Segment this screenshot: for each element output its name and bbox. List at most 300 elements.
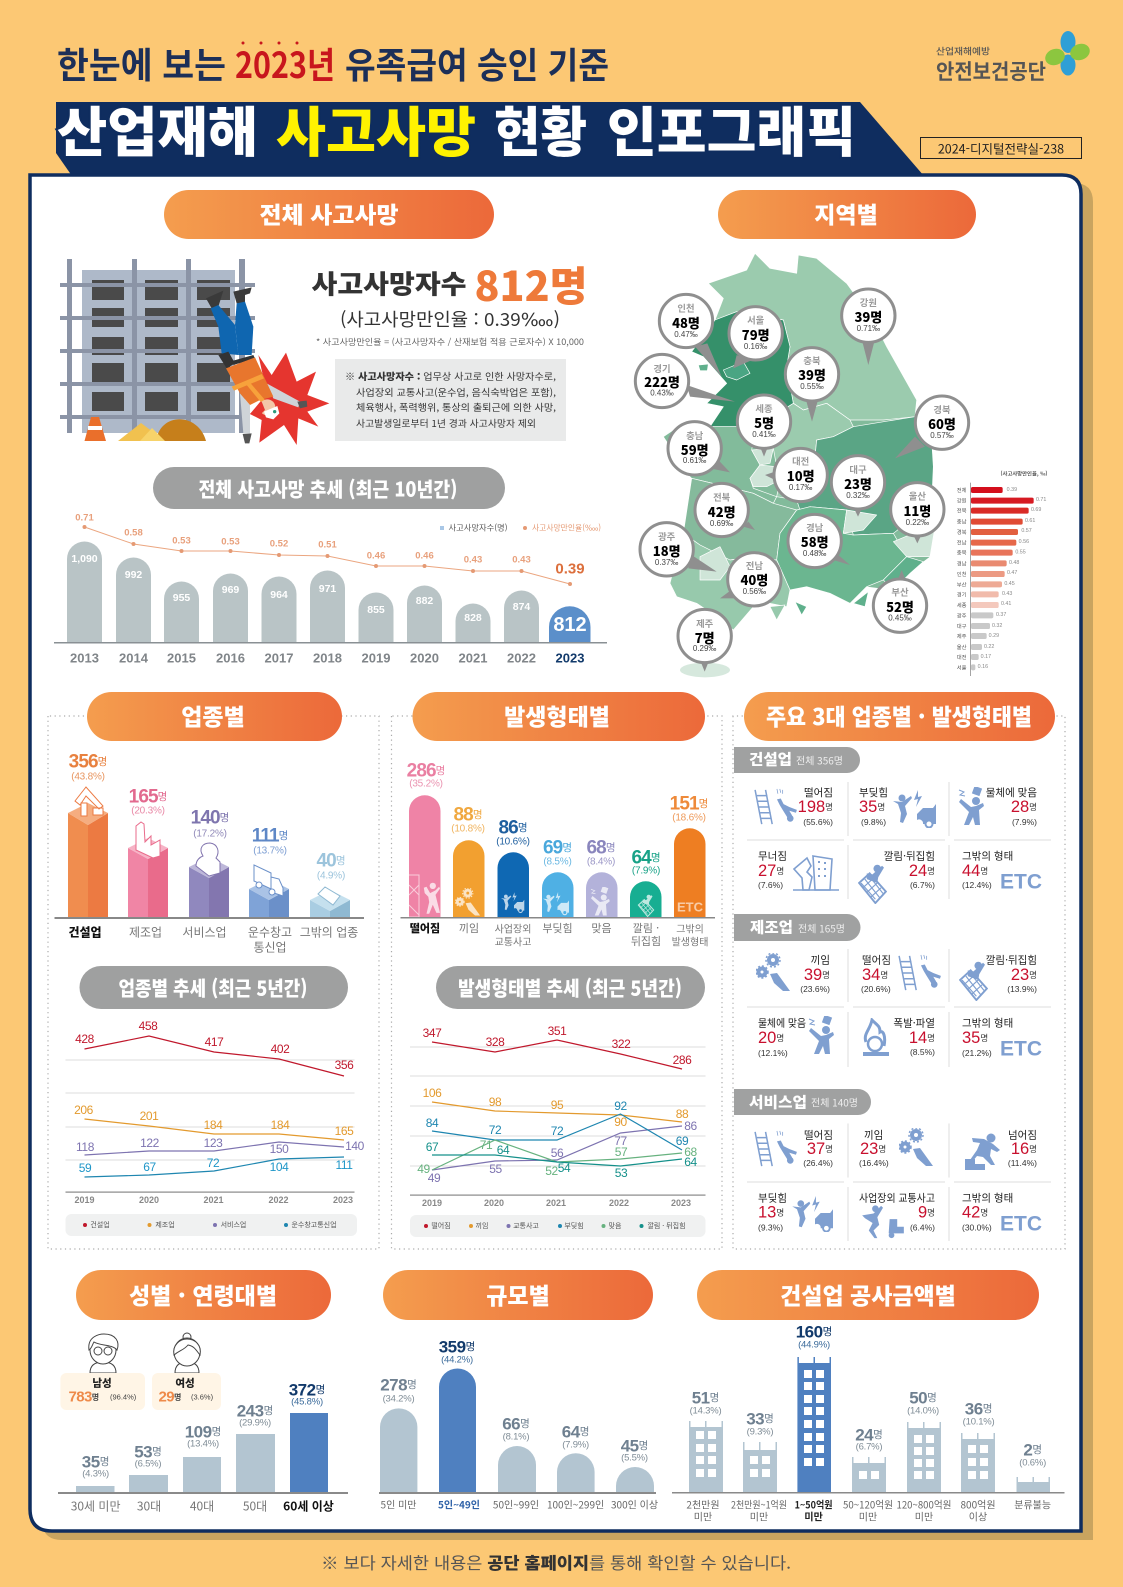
section: 건설업 header — [734, 747, 860, 773]
cell: 서비스업 부딪힘 — [758, 1190, 833, 1232]
chart: regional rate bars: 0.57 — [1021, 528, 1032, 534]
cell: 제조업 떨어짐 — [861, 952, 941, 994]
legend: accident-type trend: 끼임 — [476, 1221, 488, 1231]
map callouts: 0.56‰ — [743, 587, 766, 596]
chart: regional rate bars: 제주 — [957, 632, 967, 640]
title: 인포그래픽 — [607, 88, 856, 168]
cell: 제조업 그밖의 형태: 35명 — [962, 1029, 988, 1047]
map callouts: 0.29‰ — [693, 644, 716, 653]
line chart: accident-type trend: 64 — [497, 1143, 510, 1157]
line chart: industry trend: 2021 — [203, 1195, 224, 1205]
legend: accident-type trend — [410, 1215, 706, 1237]
accident-type labels: 교통사고 — [495, 934, 531, 948]
chart: 10 year bars: 874 — [513, 601, 530, 613]
cell: 제조업 깔림 뒤집힘: 23명 — [1011, 966, 1037, 984]
heading: 발생형태별 — [412, 692, 705, 741]
chart: 10 year bars: 2019 — [362, 650, 390, 666]
heading: 지역별: 지역별 — [814, 196, 878, 230]
accident-type labels: 뒤집힘 — [631, 933, 661, 949]
industry labels: 165명 — [129, 786, 167, 808]
chart: regional rate bars: 0.55 — [1015, 549, 1026, 555]
map callouts: 0.61‰ — [683, 456, 706, 465]
chart: regional rate bars: 0.17 — [981, 654, 991, 660]
chart: regional rate bars: 0.41 — [1001, 601, 1011, 607]
line chart: industry trend: 118 — [76, 1140, 95, 1154]
cell: 서비스업 떨어짐: (26.4%) — [803, 1158, 833, 1168]
industry labels: 그밖의 업종 — [300, 924, 358, 940]
line chart: accident-type trend: 351 — [548, 1024, 567, 1038]
line chart: industry trend: 458 — [139, 1019, 158, 1033]
cell: 건설업 부딪힘: 35명 — [859, 798, 885, 816]
map callouts: 0.45‰ — [888, 613, 912, 622]
chart: construction cost buildings: 36명 — [965, 1400, 992, 1418]
line chart: industry trend: 2023 — [333, 1195, 353, 1205]
cell: 제조업 폭발 파열: (8.5%) — [910, 1047, 935, 1057]
map callouts: 7명 — [695, 628, 715, 647]
chart: company size bars — [379, 1338, 658, 1512]
heading: 10년 추세 — [153, 467, 505, 509]
map callouts: 0.22‰ — [906, 518, 929, 527]
line chart: accident-type trend: 92 — [614, 1099, 627, 1113]
chart: regional rate bars: 0.61 — [1025, 518, 1035, 524]
accident-type labels: (10.6%) — [496, 836, 530, 848]
chart: 10 year bars: 964 — [270, 589, 288, 601]
card: male: 남성 — [92, 1376, 112, 1390]
chart: 10 year bars: 969 — [222, 584, 239, 596]
chart: regional rate bars: 0.47 — [1007, 570, 1017, 576]
map callouts: 서울 — [747, 313, 765, 327]
line chart: accident-type trend: 72 — [551, 1124, 564, 1138]
cell: 제조업 그밖의 형태 — [962, 1016, 1042, 1060]
map callouts: 인천 — [677, 300, 695, 314]
cell: 서비스업 떨어짐 — [755, 1128, 833, 1168]
section: 서비스업 header — [734, 1089, 871, 1115]
accident-type labels: (35.2%) — [409, 778, 443, 790]
legend: industry trend — [66, 1214, 357, 1236]
cell: 서비스업 그밖의 형태: 42명 — [962, 1204, 988, 1222]
chart: company size bars: (44.2%) — [441, 1354, 473, 1366]
accident-type labels: 발생형태 — [672, 934, 708, 948]
line chart: accident-type trend: 2021 — [546, 1198, 566, 1208]
heading: 성별·연령대별: 성별 · 연령대별 — [129, 1277, 277, 1311]
chart: company size bars: 45명 — [621, 1436, 648, 1456]
chart: 10 year bars: 2023 — [556, 650, 584, 666]
cell: 제조업 끼임: 끼임 — [811, 952, 830, 968]
line chart: accident-type trend: 49 — [417, 1162, 430, 1176]
cell: 서비스업 그밖의 형태 — [962, 1190, 1042, 1236]
line chart: industry trend: 184 — [271, 1118, 290, 1132]
heading: 주요 3대 — [744, 692, 1055, 741]
industry labels — [68, 752, 358, 956]
chart: age bars: 109명 — [185, 1422, 221, 1442]
heading: 10년 추세: 전체 사고사망 추세 (최근 10년간) — [198, 474, 458, 502]
map: Korea regions — [663, 253, 935, 677]
map callouts: 0.55‰ — [800, 382, 824, 391]
legend: accident-type trend: 맞음 — [609, 1221, 622, 1231]
map callouts: 23명 — [844, 474, 872, 493]
cell: 제조업 그밖의 형태: ETC — [1000, 1038, 1042, 1060]
chart: regional rate bars: 경북 — [957, 528, 967, 536]
map callouts: 40명 — [740, 570, 768, 589]
map callouts: 48명 — [672, 313, 700, 332]
note box: definition: ※ 사고사망자수 : 업무상 사고로 인한 사망자수로, — [345, 369, 556, 383]
cell: 서비스업 그밖의 형태: 그밖의 형태 — [962, 1190, 1013, 1206]
chart: regional rate bars: 0.56 — [1019, 539, 1029, 545]
line chart: accident-type trend: 347 — [423, 1026, 442, 1040]
line chart: accident-type trend: 54 — [558, 1161, 571, 1175]
cell: 건설업 떨어짐 — [755, 785, 833, 827]
accident-type labels: 부딪힘 — [542, 920, 573, 936]
chart: regional rate bars: 경기 — [957, 590, 967, 598]
cell: 건설업 무너짐: (7.6%) — [758, 880, 783, 890]
chart: 10 year bars: 2016 — [216, 650, 245, 666]
chart: regional rate bars: 강원 — [957, 497, 967, 505]
chart: regional rate bars: 전남 — [957, 539, 967, 547]
line chart: accident-type trend: 86 — [684, 1119, 697, 1133]
map callouts: 222명 — [644, 372, 680, 391]
accident-type labels: (18.6%) — [672, 812, 706, 824]
accident-type labels: (10.8%) — [451, 824, 485, 834]
chart: industry isometric bars — [54, 787, 364, 919]
section: 제조업 header: 전체 165명 — [798, 920, 845, 936]
line chart: accident-type trend: 286 — [673, 1053, 692, 1067]
cell: 서비스업 부딪힘: 부딪힘 — [758, 1190, 787, 1206]
cell: 제조업 떨어짐: 34명 — [862, 966, 888, 984]
chart: age bars: 372명 — [289, 1380, 325, 1400]
legend: accident-type trend: 부딪힘 — [564, 1221, 584, 1231]
title: 현황 — [494, 88, 587, 168]
cell: 건설업 그밖의 형태 — [962, 848, 1042, 894]
chart: 10 year bars — [54, 542, 607, 666]
line chart: accident-type trend: 90 — [614, 1115, 627, 1129]
cell: 제조업 그밖의 형태: 그밖의 형태 — [962, 1016, 1013, 1030]
legend: 10 year chart: 사고사망자수(명) — [448, 522, 508, 534]
cell: 서비스업 끼임: (16.4%) — [859, 1158, 889, 1168]
cell: 서비스업 끼임 — [859, 1128, 933, 1168]
line chart: accident-type trend: 88 — [676, 1107, 689, 1121]
line chart: industry trend: 2020 — [139, 1195, 159, 1205]
chart: construction cost buildings: 2천만원~1억원 — [731, 1496, 787, 1512]
line chart: industry trend: 123 — [204, 1136, 223, 1150]
accident-type labels: (8.5%) — [543, 856, 572, 868]
chart: construction cost buildings: 분류불능 — [1014, 1496, 1051, 1512]
map callouts: 58명 — [801, 532, 829, 551]
chart: 10 year bars: 2013 — [70, 650, 99, 666]
cell: 제조업 폭발 파열: 폭발·파열 — [893, 1016, 935, 1030]
chart: rate line: 0.46 — [415, 550, 434, 562]
chart: age bars: 35명 — [82, 1452, 109, 1472]
cell: 건설업 깔림 뒤집힘: 깔림·뒤집힘 — [884, 848, 935, 864]
accident-type labels: 떨어짐 — [410, 920, 440, 936]
chart: age bars: 30대 — [137, 1498, 161, 1514]
accident-type labels: 69명 — [543, 838, 572, 858]
chart: regional rate bars: 충남 — [957, 518, 967, 526]
chart: company size bars: (5.5%) — [621, 1452, 648, 1464]
heading: 건설업 공사금액별 — [697, 1270, 1039, 1320]
heading: 규모별 — [383, 1270, 653, 1320]
line chart: industry trend: 150 — [270, 1142, 289, 1156]
chart: company size bars: 64명 — [562, 1422, 589, 1442]
accident-type labels: 151명 — [670, 794, 708, 814]
section: 서비스업 header: 전체 140명 — [811, 1094, 858, 1110]
chart: rate line: 0.43 — [464, 554, 482, 566]
chart: construction cost buildings: (14.0%) — [907, 1406, 939, 1416]
cell: 건설업 깔림 뒤집힘: (6.7%) — [910, 880, 935, 890]
map callouts: 18명 — [653, 541, 681, 560]
accident-type labels: 88명 — [453, 804, 483, 826]
chart: 10 year bars: 992 — [125, 569, 142, 581]
chart: 10 year bars: 2018 — [313, 650, 342, 666]
title: 산업재해 — [57, 88, 258, 168]
chart: rate line: 0.39 — [555, 560, 585, 578]
code box: 2024-디지털전략실-238 — [938, 138, 1064, 158]
cell: 서비스업 떨어짐: 37명 — [807, 1140, 833, 1158]
section: 제조업 header: 제조업 — [750, 916, 793, 938]
chart: company size bars: 5인~49인 — [438, 1496, 480, 1512]
chart: 10 year bars: 2021 — [459, 650, 487, 666]
card: male: (96.4%) — [110, 1392, 137, 1402]
line chart: industry trend: 2022 — [268, 1195, 289, 1205]
chart: construction cost buildings — [672, 1322, 1064, 1524]
chart: regional rate bars: 0.16 — [978, 664, 988, 670]
cell: 제조업 깔림 뒤집힘: 깔림·뒤집힘 — [986, 952, 1037, 968]
cell: 제조업 물체에 맞음: (12.1%) — [758, 1048, 788, 1058]
chart: regional rate bars: 전체 — [957, 486, 967, 494]
chart: company size bars: 300인 이상 — [611, 1496, 658, 1512]
chart: accident-type bars — [400, 795, 715, 918]
map callouts: 0.69‰ — [710, 519, 733, 528]
chart: rate line — [75, 512, 585, 586]
line chart: accident-type trend — [410, 1024, 706, 1208]
chart: construction cost buildings: 51명 — [692, 1388, 719, 1408]
cell: 서비스업 부딪힘: 13명 — [758, 1204, 784, 1222]
chart: regional rate bars: 경남 — [957, 559, 967, 567]
chart: construction cost buildings: 120~800억원 — [896, 1496, 952, 1512]
heading: 전체 사고사망: 전체 사고사망 — [260, 196, 398, 230]
chart: age bars: (13.4%) — [187, 1438, 219, 1450]
map callouts: 경북 — [933, 402, 951, 416]
heading: 전체 사고사망 — [164, 190, 494, 239]
chart: 10 year bars: 2020 — [410, 650, 439, 666]
accident-type labels: 끼임 — [459, 920, 479, 936]
chart: company size bars: 5인 미만 — [381, 1496, 416, 1512]
chart: construction cost buildings: 50~120억원 — [843, 1496, 893, 1512]
chart: company size bars: 50인~99인 — [493, 1496, 539, 1512]
cell: 서비스업 끼임: 끼임 — [864, 1128, 883, 1142]
cell: 건설업 무너짐: 27명 — [758, 862, 784, 880]
stat: 사고사망자수 812명 — [312, 253, 588, 313]
map callouts: 제주 — [696, 616, 714, 630]
chart: rate line: 0.46 — [367, 550, 385, 562]
industry labels: 서비스업 — [182, 924, 227, 940]
map callouts: 부산 — [891, 584, 909, 598]
chart: company size bars: 359명 — [439, 1338, 475, 1356]
cell: 서비스업 끼임: 23명 — [860, 1140, 886, 1158]
line chart: accident-type trend: 57 — [615, 1145, 628, 1159]
chart: construction cost buildings: 미만 — [694, 1508, 712, 1524]
map callouts: 0.41‰ — [752, 430, 776, 439]
line chart: accident-type trend: 72 — [489, 1123, 502, 1137]
line chart: industry trend: 72 — [207, 1156, 220, 1170]
chart: age bars: (4.3%) — [82, 1468, 109, 1480]
line chart: industry trend: 2019 — [74, 1195, 95, 1205]
heading: 성별·연령대별 — [76, 1270, 331, 1320]
map callouts: 0.47‰ — [674, 330, 698, 339]
map callouts: 0.57‰ — [930, 431, 954, 440]
chart: age bars: 243명 — [237, 1402, 273, 1420]
map callouts: 강원 — [860, 295, 877, 309]
footer note: ※ 보다 자세한 내용은 공단 홈페이지 를 통해 확인할 수 있습니다. — [321, 1550, 791, 1574]
chart: regional rate bars: 0.69 — [1031, 507, 1041, 513]
heading: 발생형태별: 발생형태별 — [504, 698, 610, 732]
line chart: industry trend: 165 — [335, 1124, 354, 1138]
map callouts: 0.32‰ — [846, 491, 870, 500]
industry labels: 40명 — [316, 850, 346, 872]
heading: 주요 3대: 주요 3대 업종별 · 발생형태별 — [766, 698, 1032, 732]
map callouts: 39명 — [798, 365, 826, 384]
line chart: accident-type trend: 52 — [545, 1164, 558, 1178]
chart: 10 year bars: 855 — [367, 604, 385, 616]
chart: regional rate bars: 인천 — [957, 570, 967, 578]
cell: 서비스업 사업장외 교통사고: 사업장외 교통사고 — [859, 1190, 935, 1206]
legend: industry trend: 운수창고통신업 — [291, 1220, 337, 1230]
line chart: accident-type trend: 55 — [489, 1162, 502, 1176]
accident-type labels — [407, 760, 708, 949]
note box: definition: 사업장외 교통사고(운수업, 음식숙박업은 포함), — [356, 385, 556, 399]
chart: regional rate bars: 0.71 — [1036, 497, 1046, 503]
cell: 건설업 물체에 맞음: (7.9%) — [1012, 817, 1037, 827]
map callouts: 79명 — [742, 325, 770, 344]
line chart: industry trend: 59 — [79, 1161, 92, 1175]
chart: age bars: 30세 미만 — [71, 1498, 121, 1514]
industry labels: 통신업 — [253, 938, 287, 956]
section: 서비스업 header: 서비스업 — [749, 1092, 807, 1112]
accident-type labels: 68명 — [586, 838, 616, 858]
accident-type labels: 맞음 — [591, 920, 612, 936]
cell: 건설업 물체에 맞음: 28명 — [1011, 798, 1037, 816]
section: 제조업 header — [734, 914, 860, 941]
icon: male worker — [89, 1334, 118, 1373]
text: rate: (사고사망만인율 : 0.39‱) — [340, 306, 560, 332]
title: subtitle line: 2023년 — [235, 37, 335, 89]
cell: 제조업 끼임: 39명 — [804, 966, 830, 984]
line chart: industry trend: 428 — [75, 1032, 95, 1046]
cell: 제조업 물체에 맞음: 물체에 맞음 — [758, 1016, 806, 1030]
chart: regional rate bars: 0.32 — [992, 623, 1002, 629]
cell: 건설업 물체에 맞음: 물체에 맞음 — [986, 785, 1037, 800]
chart: age bars: (29.9%) — [239, 1418, 271, 1428]
chart: construction cost buildings: 33명 — [746, 1410, 774, 1428]
chart: 10 year bars: 971 — [319, 583, 336, 595]
legend: industry trend: 서비스업 — [221, 1220, 246, 1230]
chart: regional rate bars: 부산 — [957, 580, 967, 588]
heading: 지역별 — [718, 190, 976, 239]
logo: 안전보건공단 — [936, 31, 1092, 86]
chart: accident-type bars: ETC — [677, 900, 704, 914]
title — [57, 88, 856, 168]
section: 건설업 header: 건설업 — [749, 748, 792, 770]
accident-type labels: (7.9%) — [632, 866, 660, 876]
chart: company size bars: 66명 — [502, 1414, 530, 1434]
map callouts: 경기 — [653, 361, 671, 375]
text: formula note: * 사고사망만인율 = (사고사망자수 / 산재보험 적용 근로자수) X 10,000 — [316, 336, 584, 348]
chart: company size bars: (34.2%) — [383, 1394, 414, 1404]
line chart: accident-type trend: 64 — [684, 1155, 697, 1169]
map callouts: 5명 — [754, 413, 774, 432]
chart: construction cost buildings: 2천만원 — [686, 1496, 720, 1512]
line chart: accident-type trend: 2019 — [422, 1198, 442, 1208]
chart: company size bars: (7.9%) — [562, 1440, 589, 1450]
industry labels: (17.2%) — [193, 828, 227, 840]
line chart: accident-type trend: 95 — [551, 1098, 564, 1112]
chart: regional rate bars — [957, 469, 1047, 676]
line chart: accident-type trend: 84 — [426, 1116, 439, 1130]
cell: 건설업 떨어짐: 떨어짐 — [804, 785, 833, 800]
map callouts: 52명 — [886, 597, 914, 616]
line chart: accident-type trend: 67 — [426, 1140, 439, 1154]
line chart: accident-type trend: 56 — [551, 1146, 564, 1160]
line chart: industry trend: 122 — [140, 1136, 160, 1150]
cell: 제조업 그밖의 형태: (21.2%) — [962, 1048, 992, 1058]
chart: 10 year bars: 2015 — [167, 650, 196, 666]
cell: 건설업 떨어짐: 198명 — [798, 798, 833, 816]
line chart: accident-type trend: 77 — [614, 1134, 627, 1148]
industry labels: (13.7%) — [253, 846, 287, 856]
chart: regional rate bars: 서울 — [957, 663, 967, 671]
chart: 10 year bars: 1,090 — [71, 553, 98, 565]
chart: regional rate bars: 0.29 — [989, 633, 999, 639]
map callouts: 세종 — [755, 401, 773, 415]
cell: 서비스업 넘어짐: (11.4%) — [1008, 1158, 1037, 1168]
note box: definition: 사고발생일로부터 1년 경과 사고사망자 제외 — [356, 416, 536, 430]
accident-type labels: 사업장외 — [495, 920, 531, 936]
section: 건설업 header: 전체 356명 — [796, 752, 843, 768]
accident-type labels: 그밖의 — [676, 920, 704, 936]
cell: 서비스업 사업장외 교통사고: 9명 — [918, 1204, 935, 1222]
chart: regional rate bars: 전북 — [957, 507, 967, 515]
chart: age bars: (6.5%) — [135, 1458, 161, 1470]
cell: 제조업 깔림 뒤집힘: (13.9%) — [1007, 984, 1037, 994]
cell: 제조업 물체에 맞음 — [758, 1015, 834, 1058]
legend: accident-type trend: 깔림 · 뒤집힘 — [647, 1221, 686, 1231]
map callouts: 0.43‰ — [650, 388, 674, 397]
line chart: accident-type trend: 49 — [428, 1171, 441, 1185]
cell: 서비스업 넘어짐 — [965, 1128, 1037, 1170]
line chart: accident-type trend: 68 — [684, 1145, 697, 1159]
chart: regional rate bars: 0.37 — [996, 612, 1006, 618]
line chart: accident-type trend: 328 — [486, 1035, 505, 1049]
line chart: industry trend: 184 — [204, 1118, 223, 1132]
heading: 건설업 공사금액별: 건설업 공사금액별 — [780, 1277, 956, 1311]
title: subtitle line — [57, 37, 609, 89]
line chart: industry trend: 201 — [140, 1109, 159, 1123]
chart: rate line: 0.51 — [318, 540, 337, 550]
cell: 제조업 폭발 파열: 14명 — [909, 1029, 935, 1047]
chart: construction cost buildings: 24명 — [855, 1426, 883, 1444]
cell: 건설업 부딪힘 — [859, 785, 936, 828]
industry labels: 356명 — [69, 752, 107, 772]
map callouts: 대전 — [792, 454, 809, 468]
accident-type labels: 286명 — [407, 760, 445, 782]
map callouts: 10명 — [787, 466, 815, 485]
chart: 10 year bars: 828 — [464, 612, 482, 624]
industry labels: (43.8%) — [71, 772, 105, 782]
line chart: accident-type trend: 2022 — [609, 1198, 629, 1208]
card: female: 29명 — [158, 1388, 181, 1406]
map callouts: 59명 — [681, 440, 709, 459]
heading: 발생형태별 추세 — [436, 966, 705, 1009]
cell: 건설업 부딪힘: 부딪힘 — [859, 785, 888, 800]
